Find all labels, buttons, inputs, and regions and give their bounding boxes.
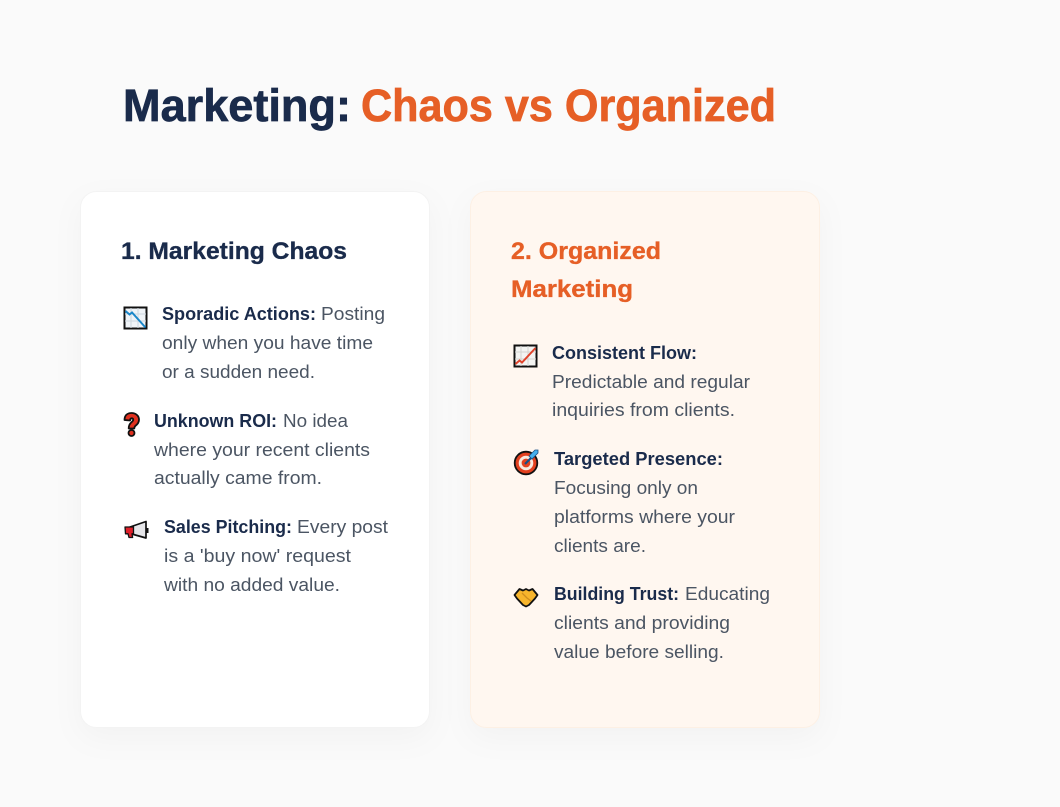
- title: Chaos vs Organized: [361, 80, 776, 131]
- item: building trust: Educating: [685, 583, 770, 604]
- item: sales pitching: with no added value.: [163, 574, 340, 595]
- heading: organized marketing: [511, 238, 661, 303]
- heading: marketing chaos: 1. Marketing Chaos: [121, 238, 347, 265]
- item: consistent flow: Consistent Flow:: [552, 342, 697, 363]
- panel: organized marketing: [470, 192, 820, 728]
- panel: marketing chaos: [80, 192, 430, 728]
- icon: megaphone: [125, 522, 148, 538]
- item: consistent flow: inquiries from clients.: [552, 399, 735, 420]
- item: targeted presence: clients are.: [554, 535, 646, 556]
- icon: chart decreasing: [124, 308, 146, 328]
- item: targeted presence: platforms where your: [554, 506, 735, 527]
- heading: organized marketing: 2. Organized: [511, 238, 661, 265]
- item: targeted presence: [554, 448, 735, 556]
- item: sporadic actions: Posting: [321, 303, 385, 324]
- icon: question mark: [124, 413, 139, 436]
- item: targeted presence: Targeted Presence:: [554, 448, 723, 469]
- item: unknown roi: Unknown ROI:: [154, 410, 277, 431]
- title: [123, 80, 776, 131]
- item: sporadic actions: or a sudden need.: [162, 361, 315, 382]
- item: sales pitching: Every post: [297, 516, 388, 537]
- item: unknown roi: No idea: [283, 410, 349, 431]
- item: targeted presence: Focusing only on: [554, 477, 698, 498]
- item: consistent flow: Predictable and regular: [552, 371, 750, 392]
- item: sporadic actions: Sporadic Actions:: [162, 303, 316, 324]
- title: Marketing:: [123, 80, 351, 131]
- item: unknown roi: actually came from.: [154, 467, 322, 488]
- item: sales pitching: Sales Pitching:: [164, 516, 292, 537]
- item: unknown roi: [153, 410, 370, 488]
- item: building trust: clients and providing: [554, 612, 730, 633]
- icon: chart increasing: [514, 346, 536, 366]
- item: building trust: value before selling.: [554, 641, 724, 662]
- heading: organized marketing: Marketing: [511, 276, 633, 303]
- item: building trust: [554, 583, 770, 662]
- item: sales pitching: is a 'buy now' request: [164, 545, 351, 566]
- icon: bullseye with dart: [515, 450, 538, 474]
- item: consistent flow: [552, 342, 750, 420]
- item: sporadic actions: [162, 303, 385, 382]
- item: building trust: Building Trust:: [554, 583, 679, 604]
- item: sporadic actions: only when you have time: [162, 332, 373, 353]
- item: sales pitching: [163, 516, 388, 595]
- icon: handshake: [514, 589, 538, 606]
- item: unknown roi: where your recent clients: [153, 439, 370, 460]
